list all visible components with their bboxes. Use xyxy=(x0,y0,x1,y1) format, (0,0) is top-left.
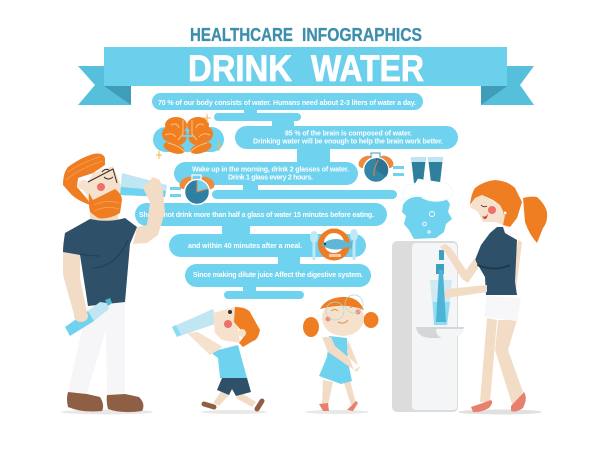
girl shadow xyxy=(305,410,369,414)
boy glass xyxy=(172,309,218,337)
woman shadow xyxy=(458,410,542,414)
woman ponytail xyxy=(523,197,547,243)
girl face details xyxy=(326,295,363,323)
fact text: morning glasses: Drink 1 glass every 2 hours. xyxy=(228,174,313,182)
man bottle xyxy=(65,298,112,336)
fact text: morning glasses xyxy=(192,166,349,182)
icon: equals sign right xyxy=(393,166,404,176)
man glasses and eye xyxy=(88,169,117,183)
man t-shirt xyxy=(63,218,137,306)
fact text: brain water: 85 % of the brain is composed of water. xyxy=(285,130,412,138)
glass being filled xyxy=(430,270,452,325)
icon: two glasses of water xyxy=(411,157,443,183)
woman face details xyxy=(481,205,507,219)
character: girl with pigtails xyxy=(303,295,378,414)
man ear xyxy=(78,180,90,190)
water cooler xyxy=(392,179,464,412)
man trousers xyxy=(68,300,125,394)
boy arm xyxy=(187,332,223,355)
banner heading: drink water xyxy=(188,48,424,89)
boy shirt xyxy=(210,345,247,378)
cooler tap xyxy=(436,250,444,274)
title: healthcare infographics: HEALTHCARE xyxy=(190,25,293,45)
speech-flow pills xyxy=(135,93,458,299)
banner heading: drink water: WATER xyxy=(311,48,424,89)
man cheek xyxy=(97,183,105,191)
girl pigtails xyxy=(303,312,378,337)
boy hair xyxy=(234,307,260,347)
boy shorts xyxy=(217,378,251,396)
icon: alarm clock left xyxy=(177,174,217,204)
fact text: brain water: Drinking water will be enough to help the brain work better. xyxy=(253,138,443,146)
woman raised arm xyxy=(440,244,478,283)
man shadow xyxy=(61,410,153,414)
woman face xyxy=(470,195,505,225)
man drinking glass xyxy=(120,173,167,197)
icon: brain xyxy=(156,114,221,159)
character: bearded man xyxy=(61,154,167,414)
boy legs xyxy=(213,390,256,407)
girl hair xyxy=(320,297,364,310)
man shoes xyxy=(67,392,143,412)
icon: equals sign left xyxy=(170,187,181,197)
banner heading: drink water: DRINK xyxy=(188,48,292,89)
character: boy drinking xyxy=(172,307,267,414)
woman lower arm xyxy=(444,285,487,298)
woman skirt xyxy=(484,296,521,321)
woman legs xyxy=(480,318,523,407)
fact text: morning glasses: Wake up in the morning, drink 2 glasses of water. xyxy=(192,166,349,174)
title: healthcare infographics: INFOGRAPHICS xyxy=(302,25,422,45)
fact text: digestive system: Since making dilute juice Affect the digestive system. xyxy=(193,272,363,279)
boy shadow xyxy=(201,410,267,414)
man hand on bottle xyxy=(74,310,88,322)
man left arm xyxy=(63,252,88,320)
boy cheek and eye xyxy=(224,310,232,328)
boy head xyxy=(213,307,240,343)
woman shoes xyxy=(471,392,526,412)
man face xyxy=(83,166,122,205)
girl shoes xyxy=(319,401,358,411)
icon: alarm clock right xyxy=(356,153,396,182)
cooler tray xyxy=(416,327,464,338)
cooler jug xyxy=(402,197,452,239)
girl legs xyxy=(322,380,356,405)
icon: plate with fish, fork and spoon xyxy=(310,228,358,260)
man hair xyxy=(63,154,105,205)
man beard xyxy=(89,189,122,218)
girl arms xyxy=(322,337,360,372)
man neck xyxy=(90,200,118,222)
man raised arm xyxy=(133,177,165,244)
fact text: before eating: Should not drink more than half a glass of water 15 minutes before eating. xyxy=(139,212,374,219)
woman arm behind xyxy=(511,240,522,290)
fact text: brain water xyxy=(253,130,443,146)
title: healthcare infographics xyxy=(190,25,422,45)
banner ribbon xyxy=(78,47,534,105)
fact text: after a meal: and within 40 minutes after a meal. xyxy=(188,243,302,250)
girl dress xyxy=(319,336,352,384)
boy shoes xyxy=(204,401,262,409)
fact text: body water: 70 % of our body consists of water. Humans need about 2-3 liters of water a day. xyxy=(158,100,416,107)
girl head xyxy=(322,300,364,336)
character: woman at water cooler xyxy=(440,180,547,414)
woman hair xyxy=(470,180,522,227)
boy ear xyxy=(238,329,246,337)
woman top xyxy=(475,227,517,295)
cooler body xyxy=(392,241,458,412)
